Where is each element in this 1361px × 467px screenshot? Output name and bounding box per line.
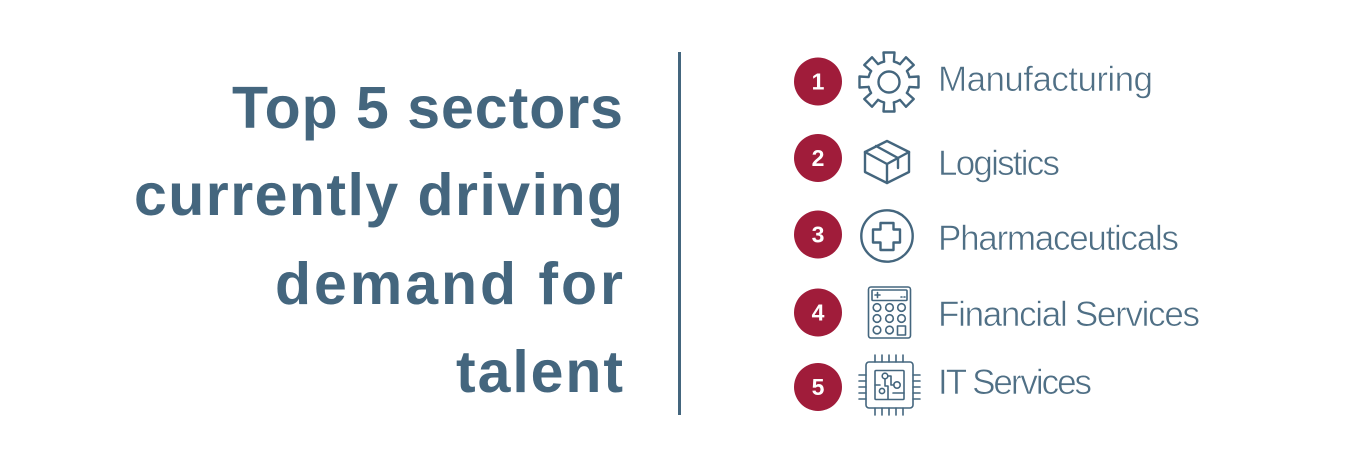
badge 4: [794, 288, 842, 336]
label: Financial Services: Financial Services: [938, 295, 1200, 334]
item 5: IT Services: [794, 355, 1092, 415]
badge 3: 3: [812, 222, 824, 248]
badge 4: 4: [812, 300, 825, 326]
badge 2: [794, 134, 842, 182]
label: Pharmaceuticals: Pharmaceuticals: [938, 219, 1179, 258]
badge 2: 2: [812, 145, 824, 171]
badge 3: [794, 210, 842, 258]
badge 5: 5: [812, 374, 825, 400]
icon: calculator: [868, 287, 910, 338]
item 3: Pharmaceuticals: [794, 210, 1179, 262]
title: [134, 75, 623, 405]
item 4: Financial Services: [794, 287, 1200, 338]
badge 1: [794, 58, 842, 106]
item 1: Manufacturing: [794, 52, 1153, 112]
badge 5: [794, 363, 842, 411]
badge 1: 1: [812, 68, 825, 94]
icon: gear: [860, 52, 918, 112]
title: currently driving: [134, 162, 623, 228]
title: talent: [456, 339, 623, 405]
label: Logistics: Logistics: [938, 144, 1060, 183]
icon: microchip: [859, 355, 920, 415]
label: IT Services: IT Services: [938, 363, 1092, 402]
title: demand for: [275, 251, 623, 317]
title: Top 5 sectors: [232, 75, 623, 141]
label: Manufacturing: Manufacturing: [938, 60, 1153, 99]
icon: box: [865, 141, 909, 183]
icon: medical cross: [861, 210, 913, 262]
item 2: Logistics: [794, 134, 1060, 183]
